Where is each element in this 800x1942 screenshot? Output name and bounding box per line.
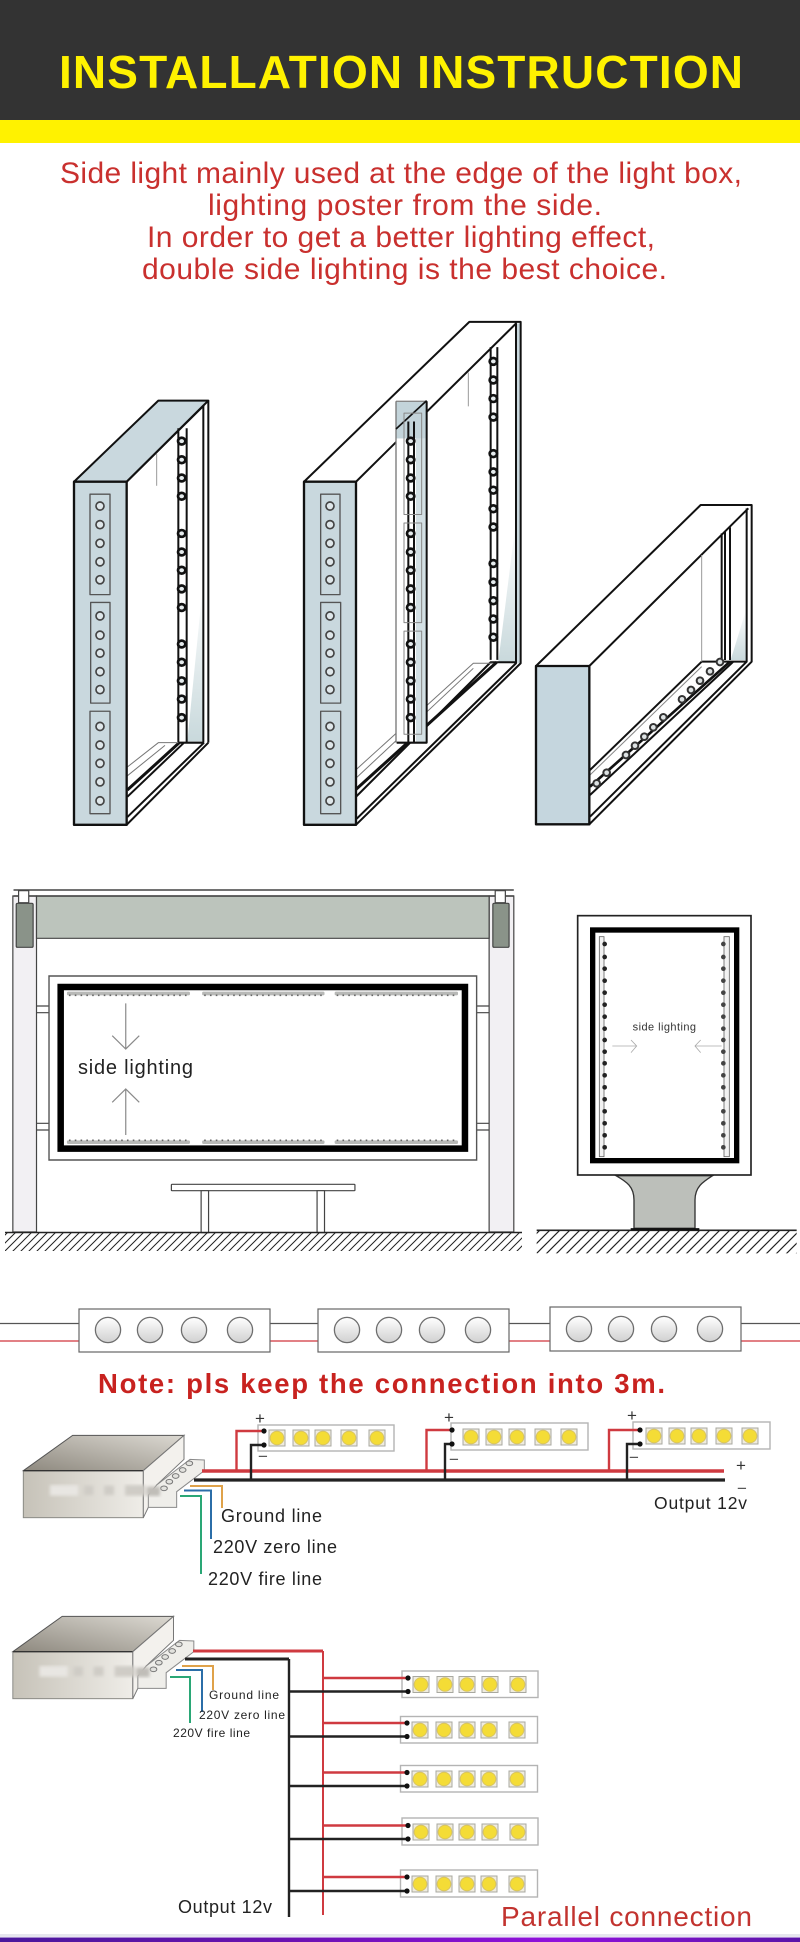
- title: INSTALLATION INSTRUCTION: [59, 46, 743, 98]
- strip row 3: [289, 1766, 538, 1792]
- ground: [537, 1229, 797, 1253]
- advertising panel: [49, 976, 477, 1160]
- sign stand: [616, 1176, 713, 1228]
- strip row 4: [289, 1818, 538, 1845]
- intro text: [60, 157, 742, 286]
- label: side lighting: side lighting: [78, 1057, 193, 1079]
- ground: [5, 1232, 522, 1251]
- power supply: [23, 1435, 204, 1518]
- strip 2: +: [444, 1408, 454, 1427]
- strip 3: +: [627, 1406, 637, 1425]
- sign frame: [578, 916, 751, 1175]
- diagram: light box with one side strip: [74, 401, 208, 825]
- strip 1: [236, 1409, 394, 1480]
- intro text: lighting poster from the side.: [208, 189, 602, 222]
- strip 3: −: [629, 1448, 639, 1467]
- input line labels: Ground line: [221, 1506, 322, 1526]
- output polarity labels: [736, 1456, 747, 1498]
- intro text: Side light mainly used at the edge of the light box,: [60, 157, 742, 190]
- output label: Output 12v: [654, 1493, 747, 1513]
- input line labels: [173, 1688, 285, 1740]
- strip 1: +: [255, 1409, 265, 1428]
- module 1: [79, 1309, 270, 1352]
- wiring diagram: parallel connection: [13, 1616, 752, 1932]
- output label: Output 12v: [178, 1897, 272, 1917]
- note: Note: pls keep the connection into 3m.: [98, 1368, 665, 1399]
- diagram: bus shelter with side lighting: [5, 890, 522, 1251]
- input wires: [180, 1486, 222, 1574]
- strip row 2: [289, 1716, 538, 1743]
- output polarity labels: +: [736, 1456, 746, 1475]
- footer bar: [0, 1934, 800, 1942]
- header banner: [0, 0, 800, 143]
- intro text: double side lighting is the best choice.: [142, 253, 667, 286]
- strip 3: [609, 1406, 770, 1480]
- strip 1: −: [258, 1447, 268, 1466]
- section label: parallel connection: Parallel connection: [501, 1901, 752, 1932]
- diagram: vertical lightbox sign: [537, 916, 797, 1253]
- left light strip: [599, 937, 607, 1157]
- bench: [171, 1184, 355, 1233]
- strip 2: −: [449, 1450, 459, 1469]
- output wires: [194, 1471, 725, 1480]
- input line labels: Ground line: [209, 1688, 279, 1702]
- wiring diagram: series connection: [23, 1406, 770, 1589]
- LED module chain: [0, 1307, 800, 1352]
- arrows: side lighting direction: [112, 1003, 139, 1135]
- main output wires: [185, 1651, 323, 1917]
- diagram: light box with bottom strip: [536, 505, 752, 824]
- intro text: In order to get a better lighting effect,: [147, 221, 655, 254]
- diagram: light box with double side strips: [304, 322, 521, 825]
- input line labels: 220V zero line: [199, 1708, 285, 1722]
- wires: [0, 1322, 800, 1324]
- input line labels: 220V fire line: [208, 1569, 322, 1589]
- label: side lighting: side lighting: [633, 1022, 696, 1034]
- output polarity labels: −: [737, 1479, 747, 1498]
- input line labels: 220V zero line: [213, 1537, 337, 1557]
- right light strip: [721, 937, 729, 1157]
- input line labels: [208, 1506, 337, 1589]
- module 3: [550, 1307, 741, 1351]
- module 2: [318, 1309, 509, 1352]
- strip row 1: [289, 1671, 538, 1698]
- power supply: [13, 1616, 194, 1699]
- strip 2: [426, 1408, 588, 1480]
- input line labels: 220V fire line: [173, 1726, 250, 1740]
- arrows: side lighting direction: [612, 1040, 722, 1053]
- input wires: [170, 1666, 213, 1723]
- strip row 5: [289, 1870, 538, 1897]
- shelter structure: [13, 890, 514, 1232]
